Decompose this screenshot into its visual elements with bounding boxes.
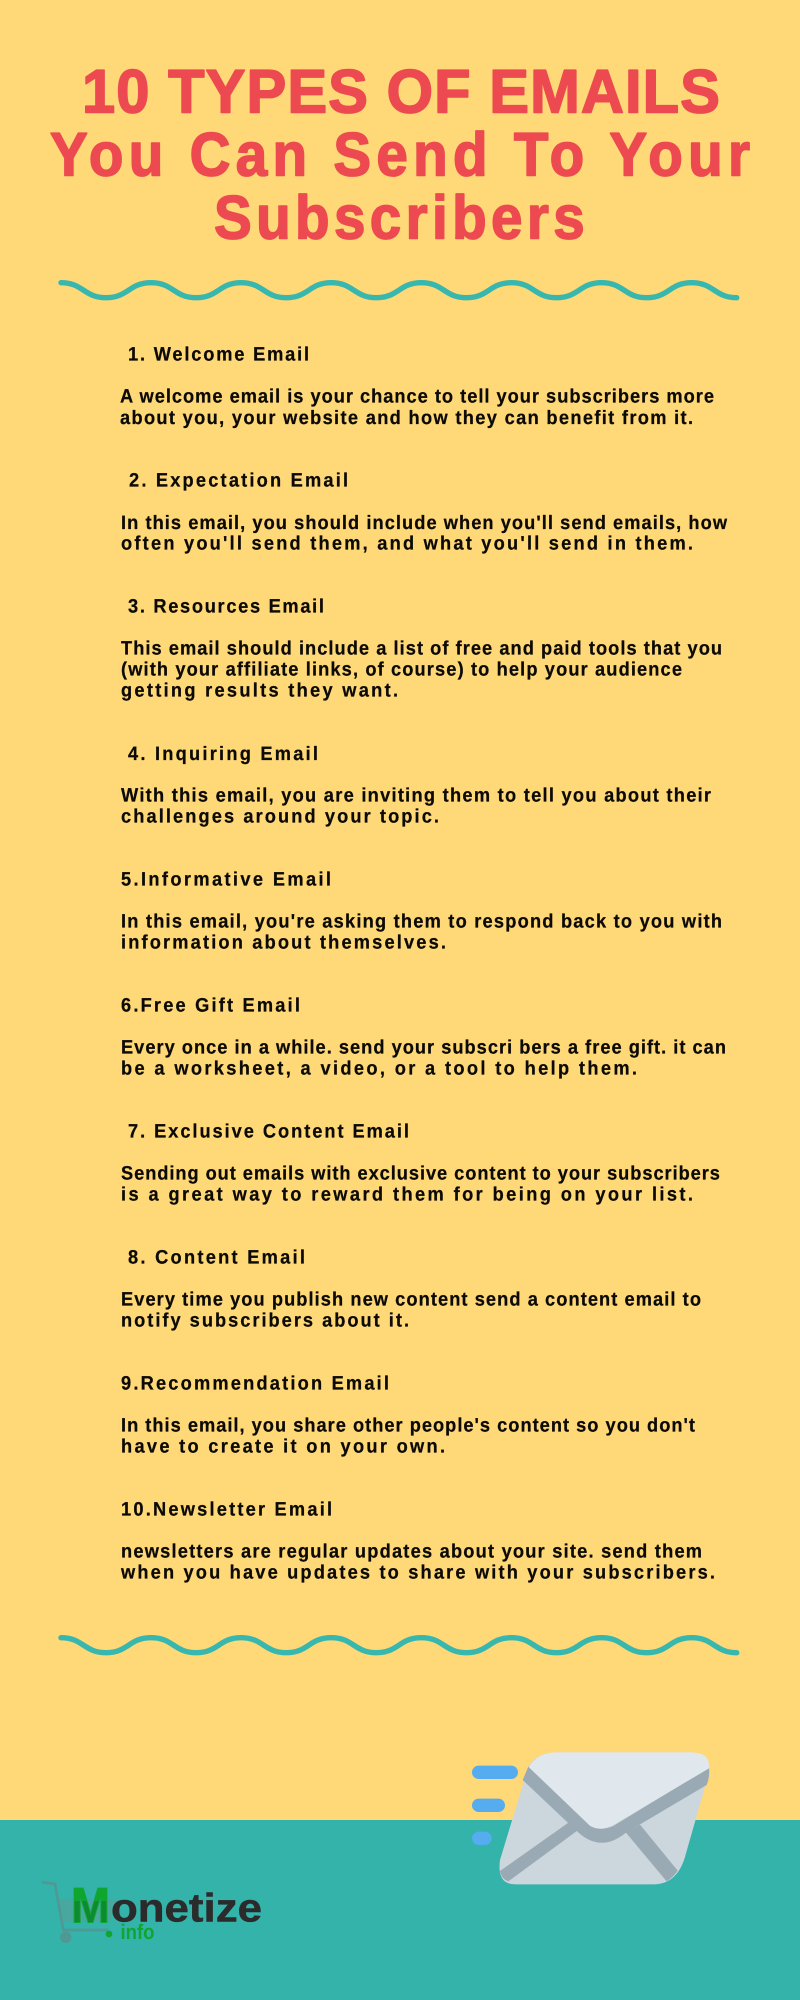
description: often you'll send them, and what you'll send in them.	[121, 532, 693, 554]
top wave divider	[61, 283, 737, 298]
description: getting results they want.	[121, 680, 398, 702]
logo cart	[43, 1882, 117, 1943]
bottom wave divider	[61, 1638, 737, 1653]
envelope straps	[500, 1822, 678, 1881]
description	[121, 1288, 701, 1332]
description	[121, 1036, 726, 1080]
heading: 3. Resources Email	[128, 596, 324, 618]
description: Every once in a while. send your subscri bers a free gift. it can	[121, 1036, 726, 1058]
description: (with your affiliate links, of course) to help your audience	[121, 659, 682, 681]
email type 3	[121, 596, 722, 702]
description	[121, 911, 722, 954]
email type 8	[121, 1246, 701, 1332]
heading: 1. Welcome Email	[128, 344, 309, 366]
description	[121, 512, 728, 554]
heading: 7. Exclusive Content Email	[128, 1121, 409, 1143]
title: Subscribers	[214, 184, 585, 253]
envelope flap	[529, 1752, 709, 1828]
logo wordmark: M	[71, 1878, 110, 1934]
description: With this email, you are inviting them to tell you about their	[121, 784, 711, 806]
title: You Can Send To Your	[50, 121, 750, 190]
heading: 10.Newsletter Email	[121, 1498, 332, 1520]
heading: 2. Expectation Email	[129, 470, 348, 492]
email type 10	[120, 1498, 715, 1584]
email type 1	[120, 344, 714, 429]
icon: flying envelope	[472, 1752, 709, 1884]
email type 9	[121, 1373, 695, 1458]
logo: Monetize info: info	[120, 1921, 154, 1944]
description: Every time you publish new content send a content email to	[121, 1288, 701, 1310]
description	[121, 784, 711, 827]
heading: 9.Recommendation Email	[121, 1373, 389, 1395]
description: have to create it on your own.	[121, 1436, 445, 1458]
description: newsletters are regular updates about your site. send them	[121, 1541, 702, 1563]
email type 5	[121, 868, 722, 954]
description	[120, 386, 714, 429]
envelope body	[499, 1752, 709, 1884]
envelope flap fold	[523, 1767, 709, 1843]
speed lines	[472, 1766, 518, 1845]
description: be a worksheet, a video, or a tool to help them.	[121, 1058, 637, 1080]
description: notify subscribers about it.	[121, 1310, 409, 1332]
description: challenges around your topic.	[121, 805, 439, 827]
logo: Monetize info: onetize	[111, 1887, 262, 1931]
description: when you have updates to share with your subscribers.	[120, 1562, 715, 1584]
description: In this email, you share other people's content so you don't	[121, 1415, 695, 1437]
logo: Monetize info	[43, 1878, 262, 1944]
email type 4	[121, 743, 711, 827]
footer band	[0, 1820, 800, 2000]
email type 6	[121, 994, 726, 1080]
description: information about themselves.	[121, 932, 446, 954]
heading: 5.Informative Email	[121, 868, 331, 890]
description: This email should include a list of free and paid tools that you	[121, 637, 722, 659]
description: Sending out emails with exclusive content to your subscribers	[121, 1162, 720, 1184]
description: In this email, you should include when you'll send emails, how	[121, 512, 728, 534]
description	[120, 1541, 715, 1584]
title	[50, 58, 750, 253]
description	[121, 637, 722, 702]
heading: 4. Inquiring Email	[128, 743, 318, 765]
title: 10 TYPES OF EMAILS	[82, 58, 720, 127]
heading: 8. Content Email	[128, 1246, 305, 1268]
email type 7	[121, 1121, 720, 1206]
email type 2	[121, 470, 728, 554]
description: is a great way to reward them for being on your list.	[121, 1184, 693, 1206]
description: A welcome email is your chance to tell your subscribers more	[120, 386, 714, 408]
heading: 6.Free Gift Email	[121, 994, 300, 1016]
description	[121, 1162, 720, 1206]
description: about you, your website and how they can benefit from it.	[120, 407, 693, 429]
description: In this email, you're asking them to respond back to you with	[121, 911, 722, 933]
description	[121, 1415, 695, 1458]
